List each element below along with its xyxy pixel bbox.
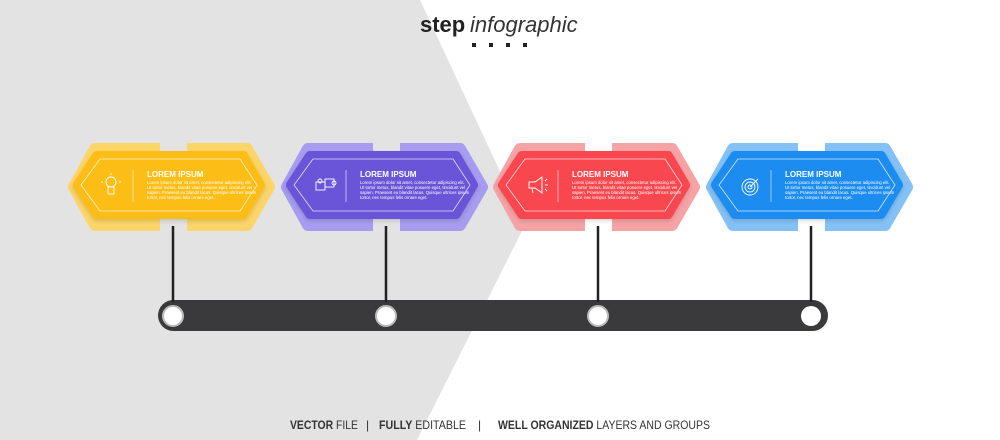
- card 4: blue: sapien. Praesent eu blandit lacus. Quisque ultrices ipsum: [785, 190, 895, 195]
- timeline bar: [158, 300, 828, 331]
- icon: target: [742, 179, 758, 195]
- card 3: red: LOREM IPSUM: [572, 170, 629, 179]
- footer text: WELL ORGANIZED LAYERS AND GROUPS: [498, 418, 710, 432]
- card 3: red: [499, 149, 694, 225]
- card 3: red: Ut tortor metus, blandit vitae posuere eget, tincidunt vel: [572, 185, 677, 190]
- footer text: FULLY EDITABLE: [379, 418, 466, 432]
- card 4: blue: [712, 149, 907, 225]
- card 1: yellow: Lorem ipsum dolor sit amet, consectetur adipiscing elit.: [147, 180, 252, 185]
- card 2: purple: [287, 149, 482, 225]
- card 2: purple: Lorem ipsum dolor sit amet, consectetur adipiscing elit.: [360, 180, 465, 185]
- footer text: |: [478, 418, 481, 432]
- title: step: [420, 12, 465, 37]
- card 1: yellow: [74, 149, 269, 225]
- card 4: blue: Ut tortor metus, blandit vitae posuere eget, tincidunt vel: [785, 185, 890, 190]
- card 3: red: Lorem ipsum dolor sit amet, consectetur adipiscing elit.: [572, 180, 677, 185]
- card 3: red: sapien. Praesent eu blandit lacus. Quisque ultrices ipsum: [572, 190, 682, 195]
- card 1: yellow: Ut tortor metus, blandit vitae posuere eget, tincidunt vel: [147, 185, 252, 190]
- footer text: VECTOR FILE: [290, 418, 358, 432]
- icon: puzzle: [316, 179, 336, 190]
- card 2: purple: Ut tortor metus, blandit vitae posuere eget, tincidunt vel: [360, 185, 465, 190]
- card 2: purple: tortor, nec tempus felis ornare eget.: [360, 195, 428, 200]
- icon: light bulb: [101, 173, 121, 194]
- title: infographic: [470, 12, 578, 37]
- card 1: yellow: LOREM IPSUM: [147, 170, 204, 179]
- background: gray arrow shape: [0, 0, 525, 440]
- card 4: blue: tortor, nec tempus felis ornare eget.: [785, 195, 853, 200]
- stems: [173, 226, 811, 302]
- icon: megaphone: [529, 177, 548, 193]
- card 4: blue: LOREM IPSUM: [785, 170, 842, 179]
- footer text: |: [366, 418, 369, 432]
- card 3: red: tortor, nec tempus felis ornare eget.: [572, 195, 640, 200]
- title: [420, 12, 578, 47]
- card 1: yellow: tortor, nec tempus felis ornare eget.: [147, 195, 215, 200]
- card 4: blue: Lorem ipsum dolor sit amet, consectetur adipiscing elit.: [785, 180, 890, 185]
- footer text: [290, 418, 710, 432]
- card 1: yellow: sapien. Praesent eu blandit lacus. Quisque ultrices ipsum: [147, 190, 257, 195]
- card 2: purple: sapien. Praesent eu blandit lacus. Quisque ultrices ipsum: [360, 190, 470, 195]
- card 2: purple: LOREM IPSUM: [360, 170, 417, 179]
